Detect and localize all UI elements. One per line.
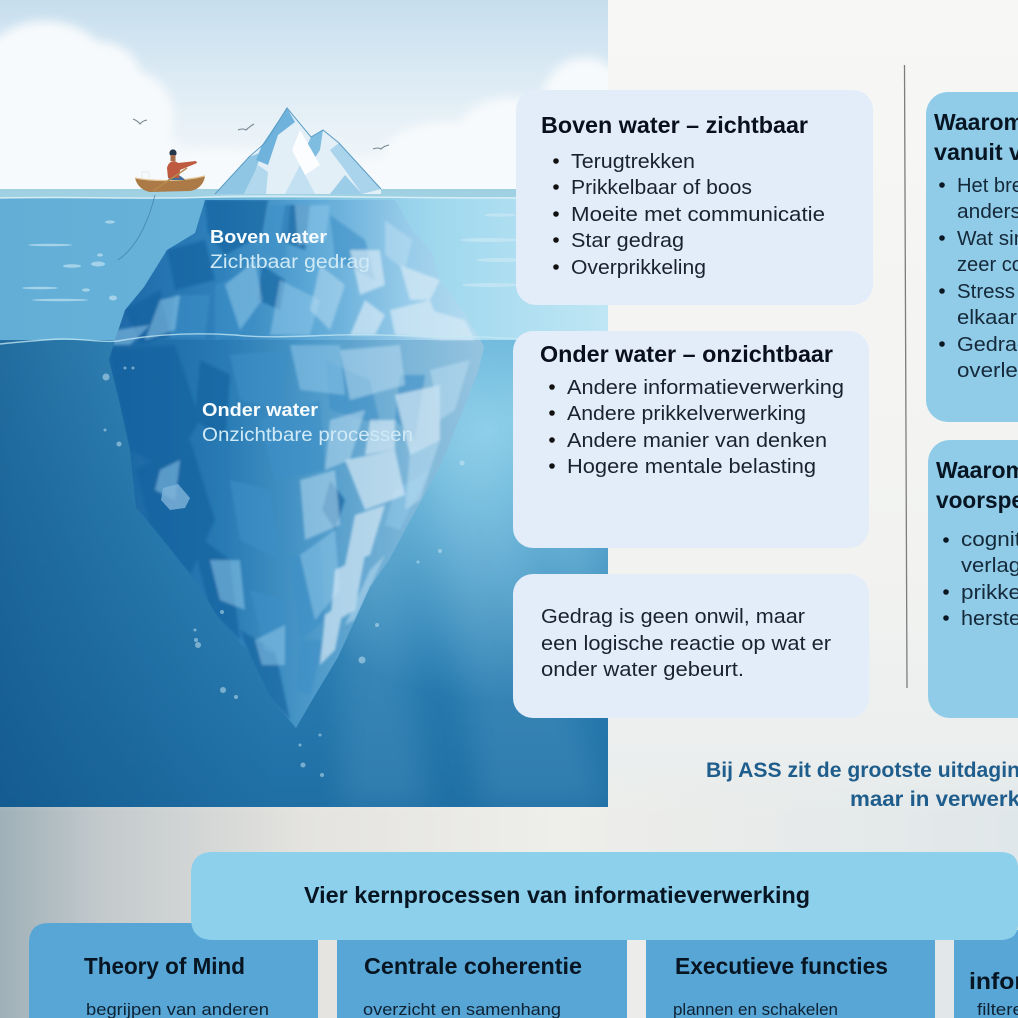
heading: Boven water – zichtbaar	[541, 112, 808, 138]
bullet list: Star gedrag	[571, 230, 684, 252]
card: centrale coherentie	[337, 930, 627, 1018]
upper water	[0, 198, 608, 344]
bullet list: Hogere mentale belasting	[567, 456, 816, 478]
card: centrale coherentie: Centrale coherentie	[364, 953, 582, 979]
facets: dark side	[109, 200, 345, 720]
light rays	[341, 515, 598, 806]
waterline across iceberg	[0, 334, 608, 344]
bullet list: cognit	[961, 529, 1018, 551]
facets: near white	[320, 250, 475, 665]
card: theory of mind: Theory of Mind	[84, 953, 245, 979]
bullet list	[943, 529, 1018, 630]
panel: waarom voorspelbaar	[928, 440, 1018, 718]
bullet list	[549, 377, 844, 478]
sky	[0, 0, 608, 153]
bullet list: verlag	[961, 555, 1018, 577]
bullet list: elkaar	[957, 307, 1017, 329]
callout: grootste uitdaging	[706, 759, 1018, 811]
bullet list: Moeite met communicatie	[571, 204, 825, 226]
facets: light blue	[112, 205, 430, 665]
bullet list: Terugtrekken	[571, 151, 695, 173]
card: executieve functies: Executieve functies	[675, 953, 888, 979]
iceberg label: boven water	[210, 227, 370, 273]
light glow on the right	[350, 340, 608, 678]
panel: gedrag conclusie	[513, 574, 869, 718]
bullet list: Overprikkeling	[571, 257, 706, 279]
card: executieve functies	[646, 930, 935, 1018]
bullet list: anders	[957, 201, 1018, 223]
tether line	[118, 195, 155, 260]
divider line	[904, 65, 907, 688]
water surface line	[0, 196, 608, 198]
clouds	[0, 17, 608, 158]
bullet list: Prikkelbaar of boos	[571, 177, 752, 199]
bullet list: Andere manier van denken	[567, 430, 827, 452]
callout: grootste uitdaging: maar in verwerk	[850, 788, 1018, 811]
water sparkles	[22, 213, 524, 301]
panel: boven water zichtbaar	[516, 90, 873, 305]
facets: pale blue	[300, 220, 470, 625]
dark left depth	[0, 340, 198, 807]
iceberg label: onder water: Onder water	[202, 400, 318, 420]
card: informatie filteren	[954, 930, 1018, 1018]
facets	[109, 200, 475, 720]
bullet list: Andere informatieverwerking	[567, 377, 844, 399]
iceberg under water body	[100, 195, 500, 740]
iceberg label: boven water: Zichtbaar gedrag	[210, 252, 370, 273]
rock patch on iceberg	[161, 484, 190, 510]
distant sea	[0, 189, 516, 198]
bullet list	[553, 151, 825, 279]
facets: mid blue	[170, 205, 425, 695]
iceberg tip above water	[215, 108, 381, 194]
boat with rower	[135, 149, 205, 192]
iceberg label: boven water: Boven water	[210, 227, 327, 247]
bullet list	[939, 175, 1018, 382]
lower water	[0, 340, 608, 807]
panel: gedrag conclusie: een logische reactie op wat er	[541, 633, 831, 655]
lower background band	[0, 804, 1018, 1018]
panel: waarom vanuit	[926, 92, 1018, 422]
iceberg label: onder water	[202, 400, 413, 446]
card: theory of mind	[29, 923, 318, 1018]
birds	[133, 119, 389, 149]
bullet list: prikke	[961, 582, 1018, 604]
header: vier kernprocessen: Vier kernprocessen van informatieverwerking	[304, 882, 810, 908]
lower section tint	[232, 340, 484, 728]
callout: grootste uitdaging: Bij ASS zit de grootste uitdagin	[706, 759, 1018, 782]
panel: gedrag conclusie: onder water gebeurt.	[541, 659, 744, 681]
bullet list: herste	[961, 608, 1018, 630]
bubbles	[102, 366, 464, 777]
iceberg illustration	[0, 0, 630, 807]
header: vier kernprocessen	[191, 852, 1018, 940]
panel: gedrag conclusie: Gedrag is geen onwil, maar	[541, 606, 805, 628]
bullet list: Andere prikkelverwerking	[567, 403, 806, 425]
iceberg label: onder water: Onzichtbare processen	[202, 425, 413, 446]
bullet list: Stress	[957, 281, 1015, 303]
panel: onder water onzichtbaar	[513, 331, 869, 548]
heading: Onder water – onzichtbaar	[540, 341, 833, 367]
